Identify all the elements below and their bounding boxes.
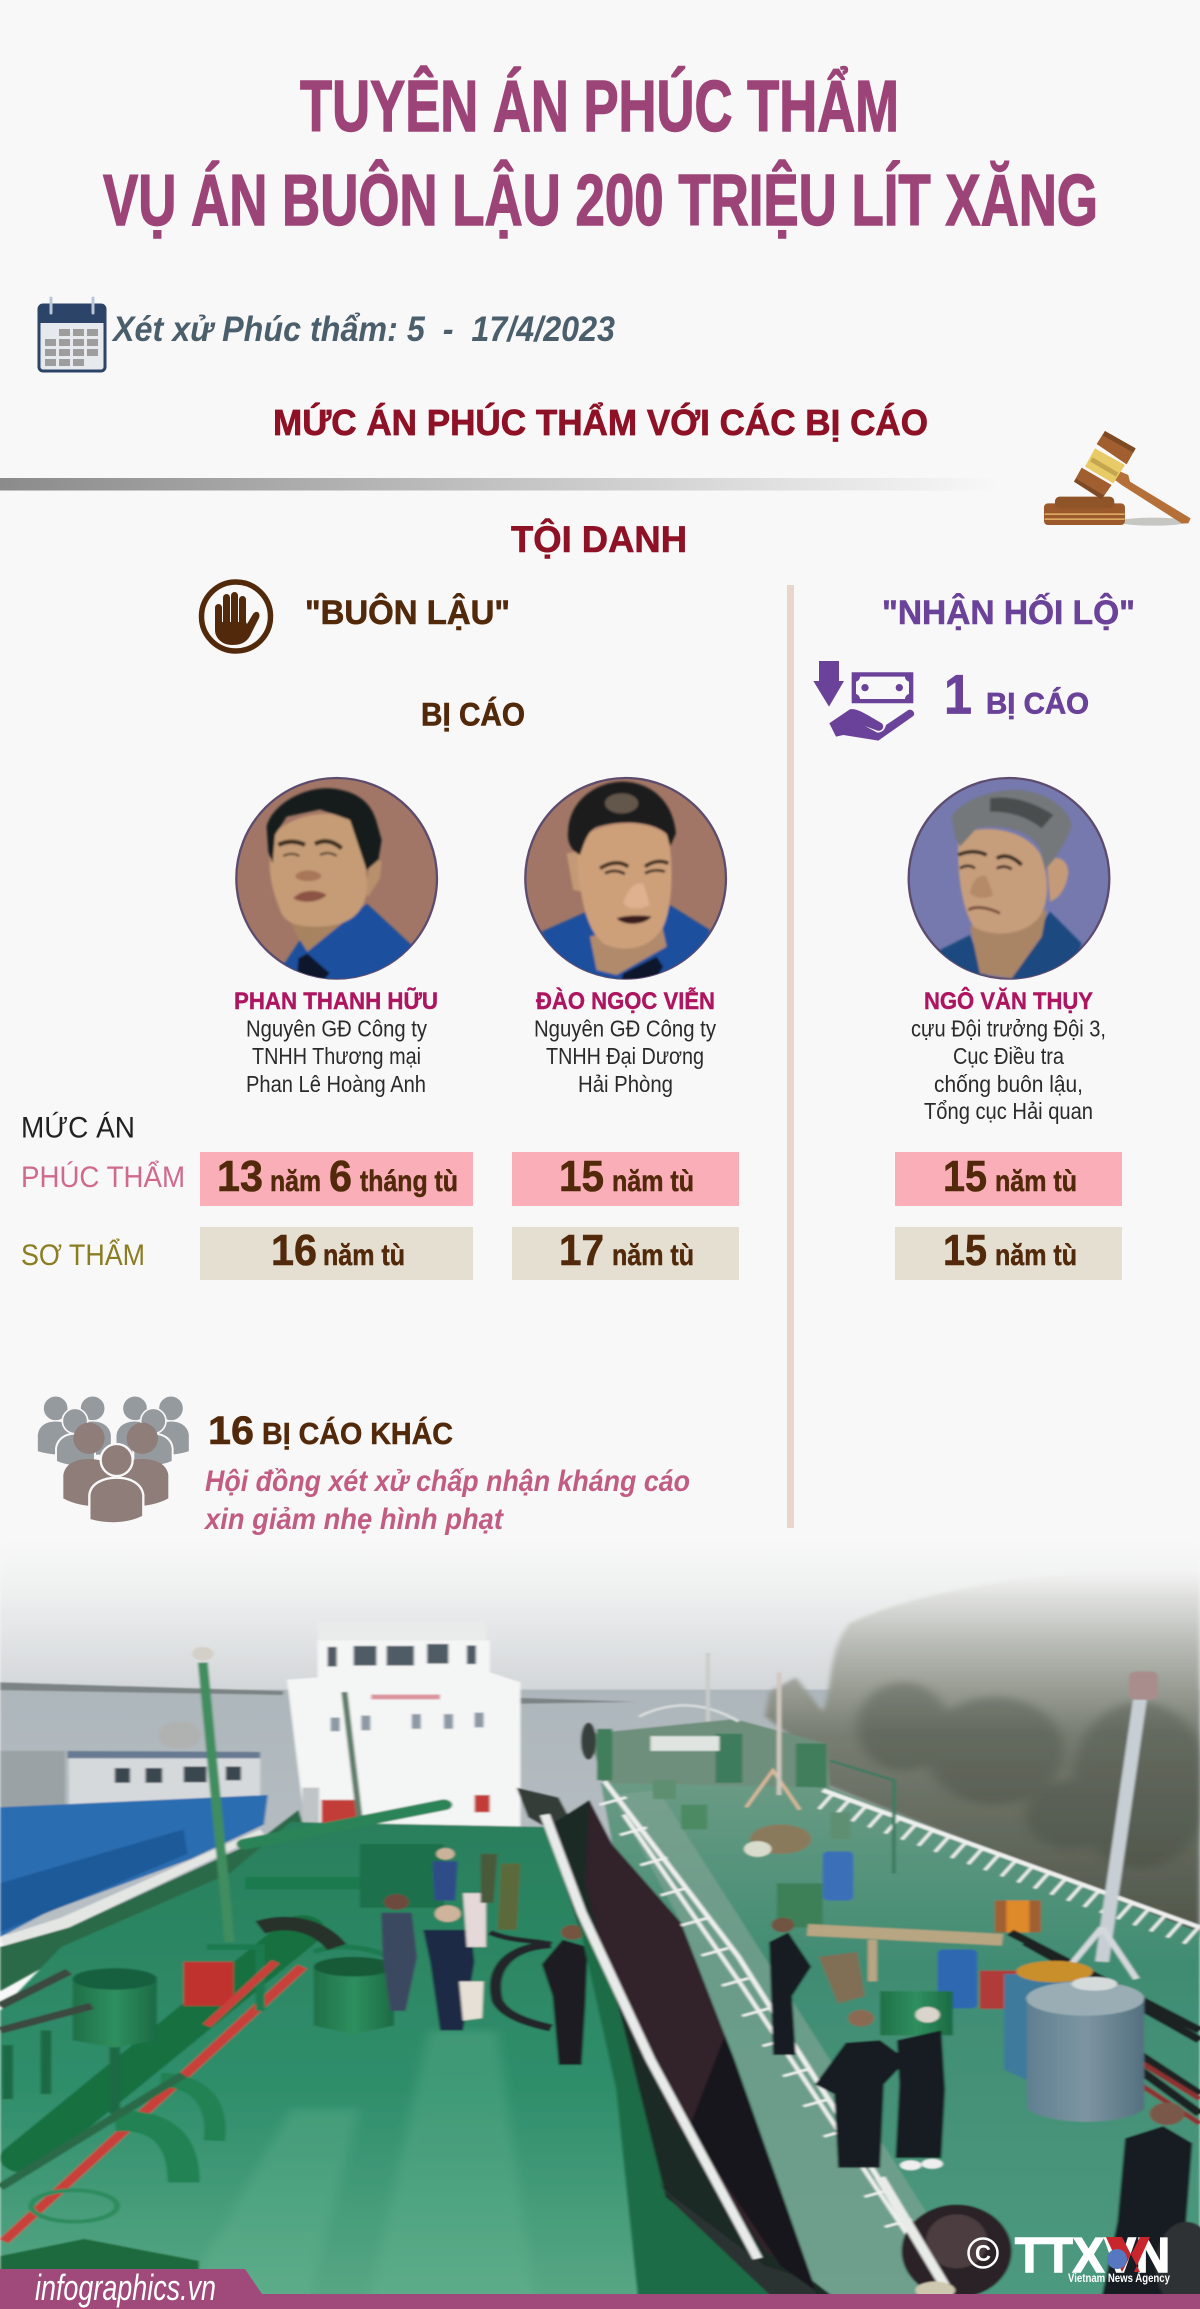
photo: tanker ships xyxy=(0,1540,1200,2309)
defendant info: Phan Thanh Hữu: Nguyên GĐ Công ty xyxy=(246,1016,427,1042)
count: 1 defendant xyxy=(944,662,1089,726)
left bulwark and lower hull xyxy=(570,1883,804,2309)
row labels xyxy=(21,1112,185,1272)
defendant info: Ngô Văn Thụy: Tổng cục Hải quan xyxy=(924,1098,1093,1124)
people right deck xyxy=(769,1918,1192,2295)
other defendants note: BỊ CÁO KHÁC xyxy=(262,1416,453,1451)
logo: TTXVN: Vietnam News Agency xyxy=(1068,2271,1170,2285)
charge label: "NHẬN HỐI LỘ" xyxy=(882,593,1135,632)
far tanker section xyxy=(589,1719,830,1790)
icon: gavel xyxy=(1044,431,1191,526)
heading: defendants: BỊ CÁO xyxy=(421,696,525,732)
subtitle: MỨC ÁN PHÚC THẨM VỚI CÁC BỊ CÁO xyxy=(273,401,928,443)
sentence table: appeal row: 13 xyxy=(217,1152,263,1201)
icon: calendar xyxy=(39,298,105,371)
icon: money in hand xyxy=(813,661,914,741)
panel: smuggling charge xyxy=(202,582,510,651)
sentence table: first-instance row: năm tù xyxy=(323,1239,405,1272)
defendant info: Ngô Văn Thụy: cựu Đội trưởng Đội 3, xyxy=(911,1016,1106,1042)
far blue boat xyxy=(0,1751,65,1807)
sentence table: appeal row: 15 xyxy=(559,1152,604,1201)
pipes and machinery xyxy=(245,1805,444,1844)
icon: stop hand xyxy=(202,582,270,651)
source: infographics.vn: infographics.vn xyxy=(35,2267,216,2308)
defendant info: Phan Thanh Hữu xyxy=(234,987,438,1097)
portrait: Đào Ngọc Viễn xyxy=(525,778,726,983)
sentence table: first-instance row: năm tù xyxy=(612,1239,694,1272)
defendant info: Đào Ngọc Viễn: Nguyên GĐ Công ty xyxy=(534,1016,716,1042)
charge label: "BUÔN LẬU" xyxy=(305,593,510,632)
left ship deck xyxy=(0,1822,658,2309)
sentence table: first-instance row: 17 xyxy=(559,1226,604,1275)
sentence table: first-instance row: năm tù xyxy=(995,1239,1077,1272)
sentence table: appeal row xyxy=(200,1152,1122,1206)
other defendants note: 16 xyxy=(208,1409,254,1453)
defendant info: Đào Ngọc Viễn: TNHH Đại Dương xyxy=(546,1043,704,1069)
row labels: PHÚC THẨM xyxy=(21,1160,185,1194)
right deck equipment xyxy=(653,1780,676,1799)
defendant info: Phan Thanh Hữu: TNHH Thương mại xyxy=(252,1043,421,1069)
people left deck xyxy=(381,1848,520,2030)
defendant info: Đào Ngọc Viễn: Hải Phòng xyxy=(578,1071,673,1097)
sentence table: first-instance row: 16 xyxy=(271,1226,317,1275)
sentence table: appeal row: năm xyxy=(270,1165,321,1198)
defendant info: Ngô Văn Thụy: Cục Điều tra xyxy=(953,1043,1064,1069)
defendant info: Phan Thanh Hữu: Phan Lê Hoàng Anh xyxy=(246,1071,426,1097)
base under hulls xyxy=(547,1800,849,2309)
right ship deck xyxy=(601,1783,1200,2309)
other defendants note xyxy=(203,1409,690,1536)
row labels: MỨC ÁN xyxy=(21,1112,135,1144)
count: 1 defendant: BỊ CÁO xyxy=(986,686,1089,720)
defendant info: Ngô Văn Thụy: chống buôn lậu, xyxy=(934,1071,1083,1097)
right ship hull xyxy=(585,1800,813,2281)
sentence table: appeal row: 15 xyxy=(943,1152,987,1201)
defendant info: Đào Ngọc Viễn: ĐÀO NGỌC VIỄN xyxy=(536,986,715,1015)
column divider xyxy=(787,585,794,1528)
defendant info: Đào Ngọc Viễn xyxy=(534,986,716,1097)
white superstructure xyxy=(318,1621,486,1641)
count: 1 defendant: 1 xyxy=(944,662,972,726)
divider bar xyxy=(0,478,1000,490)
defendant info: Ngô Văn Thụy xyxy=(911,987,1106,1124)
icon: group of people xyxy=(37,1396,189,1523)
sentence table: appeal row: năm tù xyxy=(995,1165,1077,1198)
portrait: Phan Thanh Hữu xyxy=(236,778,437,983)
title xyxy=(103,66,1098,241)
defendant info: Phan Thanh Hữu: PHAN THANH HỮU xyxy=(234,987,438,1015)
portrait: Ngô Văn Thụy xyxy=(909,778,1109,983)
footer band xyxy=(0,2269,1200,2309)
trial date: Xét xử Phúc thẩm: 5 - 17/4/2023 xyxy=(111,310,615,349)
other defendants note: Hội đồng xét xử chấp nhận kháng cáo xyxy=(205,1465,690,1498)
sentence table: appeal row: 6 xyxy=(329,1152,352,1201)
logo: TTXVN: C xyxy=(975,2240,991,2266)
heading: charges: TỘI DANH xyxy=(511,518,687,560)
sentence table: first-instance row xyxy=(200,1226,1122,1280)
sentence table: appeal row: năm tù xyxy=(612,1165,694,1198)
row labels: SƠ THẨM xyxy=(21,1238,145,1272)
defendant info: Ngô Văn Thụy: NGÔ VĂN THỤY xyxy=(924,987,1093,1015)
sentence table: first-instance row: 15 xyxy=(943,1226,987,1275)
other defendants note: xin giảm nhẹ hình phạt xyxy=(203,1503,505,1536)
logo: TTXVN: TTXVN xyxy=(1015,2229,1170,2283)
title: TUYÊN ÁN PHÚC THẨM xyxy=(300,66,899,147)
panel: bribery charge xyxy=(813,593,1135,741)
sentence table: appeal row: tháng tù xyxy=(360,1165,458,1198)
